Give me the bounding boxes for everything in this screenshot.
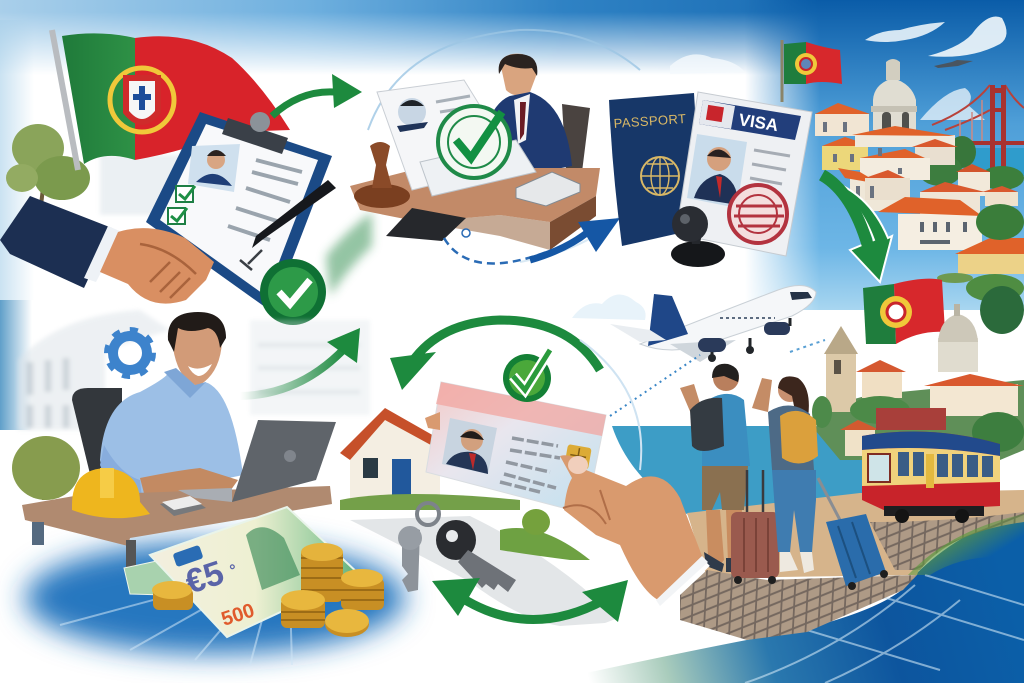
trees behind houses — [918, 136, 1024, 210]
banknotes: €5 — [181, 554, 228, 602]
id card — [426, 382, 606, 514]
officer scene — [350, 54, 600, 250]
tree lower-left — [12, 436, 80, 500]
dotted flight path — [610, 340, 825, 416]
town right lower — [812, 304, 1024, 460]
airplane — [610, 285, 816, 362]
stack of papers — [516, 172, 580, 206]
id portrait — [442, 418, 497, 474]
bridge — [932, 85, 1024, 176]
tram — [862, 432, 1000, 523]
man traveller — [680, 364, 750, 572]
sidewalk — [687, 490, 1024, 578]
office chair — [72, 388, 122, 474]
clipboard checklist — [146, 112, 332, 312]
small notebook — [160, 496, 206, 516]
document front — [420, 140, 536, 196]
travelling couple — [680, 364, 888, 590]
desk — [22, 486, 332, 568]
house — [340, 408, 520, 510]
town top right — [815, 59, 1024, 334]
gear icon — [107, 330, 153, 376]
red stamp — [729, 185, 787, 243]
desk — [350, 168, 600, 250]
pen — [252, 180, 336, 248]
green approved stamp — [438, 106, 510, 178]
badge: green check on clipboard — [260, 212, 372, 325]
handshake — [0, 196, 214, 304]
officer figure — [476, 54, 572, 172]
portrait on clipboard — [188, 144, 240, 192]
lawn — [908, 514, 1024, 575]
sea and promenade — [612, 426, 1024, 640]
banknotes — [124, 507, 360, 637]
sea — [612, 426, 1000, 516]
visa document: VISA — [737, 110, 780, 135]
woman traveller — [752, 376, 818, 573]
black stamp — [671, 206, 725, 267]
hard hat — [72, 468, 150, 518]
domed church — [871, 59, 917, 132]
road and garden — [350, 509, 620, 626]
rubber stamp — [354, 142, 410, 208]
man at laptop scene — [22, 312, 336, 568]
keys — [398, 503, 516, 592]
laptop — [178, 420, 336, 502]
arrow: green down to second flag — [822, 175, 892, 282]
houses — [815, 103, 1024, 274]
visa document — [676, 92, 812, 256]
background building left — [18, 155, 190, 430]
arrow: green curved left above card — [390, 320, 600, 390]
arrow: green clipboard to officer — [272, 74, 362, 116]
sky clouds and plane top right — [670, 16, 1007, 120]
document back — [377, 80, 516, 190]
hand holding card — [425, 412, 708, 606]
visa portrait — [687, 134, 747, 208]
second flag — [863, 279, 945, 344]
passport — [609, 93, 702, 246]
checkboxes — [168, 186, 195, 224]
man — [100, 312, 243, 498]
coins — [152, 543, 384, 637]
cloud near plane — [572, 294, 646, 320]
faint circle around officer scene — [368, 30, 650, 262]
tower — [824, 326, 858, 412]
ink pad — [386, 208, 466, 241]
suitcase blue — [818, 478, 888, 590]
arrow: green up-right from laptop — [240, 328, 360, 396]
circle outline around card — [580, 340, 641, 470]
arrow: green bottom double-headed — [432, 578, 628, 622]
chair — [562, 104, 590, 172]
dome — [938, 304, 978, 372]
cobblestones — [680, 570, 917, 640]
hillside backdrop lower — [815, 380, 1024, 460]
dashed blue arrow — [444, 218, 620, 263]
tree left — [6, 124, 90, 215]
flag: Portugal large — [52, 30, 290, 170]
small flag top — [782, 40, 842, 102]
chip — [564, 444, 592, 470]
banknotes: ° — [228, 562, 239, 580]
check badge on card — [503, 350, 551, 402]
greenery — [937, 204, 1024, 334]
banknotes: 500 — [219, 600, 257, 631]
passport: PASSPORT — [613, 111, 687, 131]
background building mid-left — [250, 320, 370, 415]
white swoosh under hand — [540, 563, 707, 642]
suitcase red — [731, 470, 779, 584]
